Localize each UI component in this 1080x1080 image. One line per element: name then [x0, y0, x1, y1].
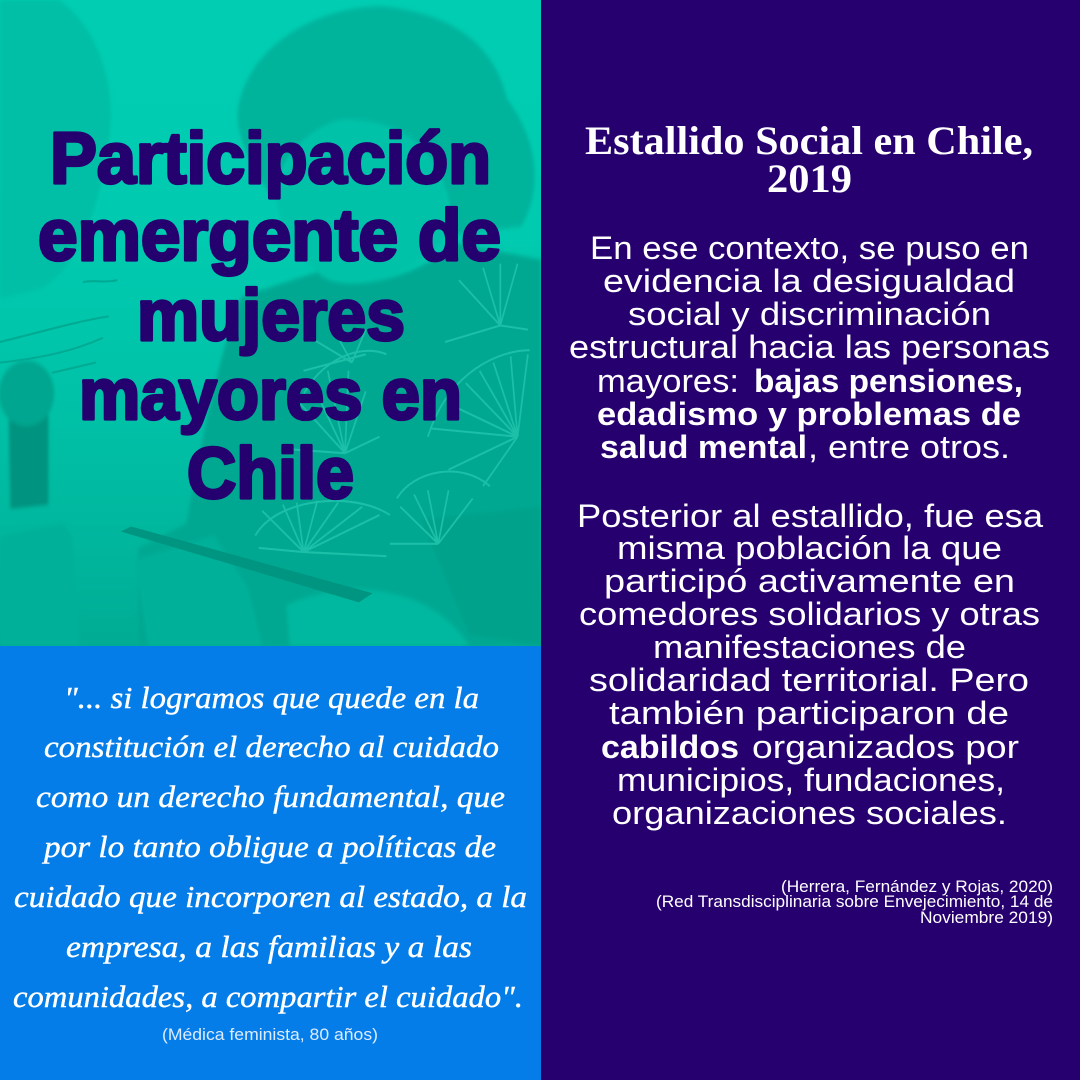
text block: participation paragraph: comedores solidarios y otras: [579, 596, 1040, 632]
text block: context paragraph: En ese contexto, se puso en: [590, 230, 1029, 266]
text block: participation paragraph: manifestaciones de: [653, 629, 966, 665]
title: Participación: [50, 119, 491, 199]
panel: quote background: [0, 646, 541, 1080]
text block: context paragraph: edadismo y problemas de: [597, 396, 1021, 432]
text block: participation paragraph: participó activamente en: [604, 563, 1015, 599]
text block: participation paragraph: también participaron de: [609, 695, 1009, 731]
references: [656, 878, 1053, 927]
text block: context paragraph: evidencia la desigualdad: [603, 263, 1015, 299]
text block: participation paragraph: cabildos: [601, 729, 739, 765]
text block: participation paragraph: solidaridad territorial. Pero: [589, 662, 1029, 698]
title: mayores en: [79, 355, 462, 435]
references: Noviembre 2019): [920, 909, 1053, 927]
text block: context paragraph: social y discriminación: [628, 296, 991, 332]
text block: context paragraph: mayores:: [597, 363, 739, 399]
text block: participation paragraph: misma población la que: [617, 530, 1002, 566]
title: emergente de: [38, 196, 501, 276]
quote text: empresa, a las familias y a las: [66, 929, 472, 964]
text block: participation paragraph: Posterior al estallido, fue esa: [577, 498, 1043, 534]
panel: right background: [541, 0, 1080, 1080]
quote text: por lo tanto obligue a políticas de: [42, 829, 496, 864]
text block: participation paragraph: organizados por: [752, 729, 1019, 765]
text block: context paragraph: [569, 230, 1050, 465]
text block: context paragraph: salud mental: [600, 429, 807, 465]
references: (Herrera, Fernández y Rojas, 2020): [781, 878, 1053, 896]
text block: participation paragraph: organizaciones sociales.: [612, 795, 1007, 831]
text block: participation paragraph: municipios, fundaciones,: [617, 762, 1005, 798]
quote text: "... si logramos que quede en la: [64, 680, 479, 715]
quote text: constitución el derecho al cuidado: [44, 729, 499, 764]
heading: Estallido Social: [585, 118, 1033, 201]
quote text: como un derecho fundamental, que: [36, 779, 505, 814]
heading: Estallido Social: 2019: [767, 156, 852, 201]
text block: context paragraph: , entre otros.: [808, 429, 1010, 465]
title: mujeres: [137, 276, 405, 356]
text block: participation paragraph: [577, 498, 1043, 831]
panel: photo with teal duotone: [0, 0, 541, 646]
quote attribution: (Médica feminista, 80 años): [162, 1025, 378, 1044]
title: Chile: [187, 434, 354, 514]
heading: Estallido Social: Estallido Social en Chile,: [585, 118, 1033, 163]
quote text: [13, 680, 527, 1014]
text block: context paragraph: bajas pensiones,: [754, 363, 1023, 399]
title: [38, 119, 501, 514]
quote text: cuidado que incorporen al estado, a la: [14, 879, 527, 914]
references: (Red Transdisciplinaria sobre Envejecimiento, 14 de: [656, 893, 1053, 911]
text block: context paragraph: estructural hacia las personas: [569, 329, 1050, 365]
quote text: comunidades, a compartir el cuidado".: [13, 979, 523, 1014]
